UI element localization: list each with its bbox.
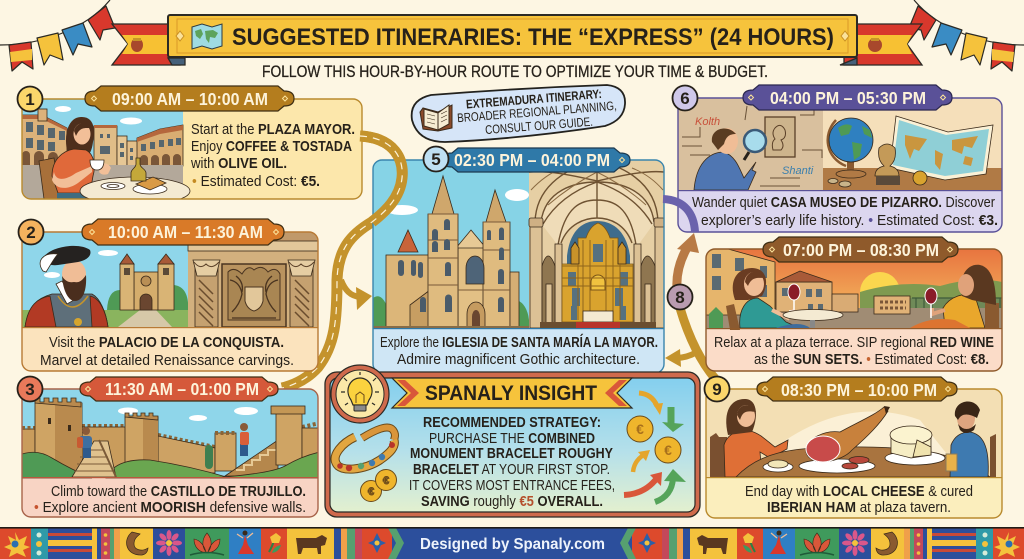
text: recommended strategy: RECOMMENDED STRATEGY: bbox=[423, 415, 601, 431]
flag ribbon right bbox=[840, 24, 922, 65]
badge 9 bbox=[704, 376, 730, 402]
illustration: man with magnifier at wall: Shanti bbox=[782, 165, 814, 177]
panel: stop 8 terrace sunset bbox=[706, 249, 1002, 371]
text: recommended strategy bbox=[409, 415, 615, 510]
badge 6: 6 bbox=[680, 89, 690, 108]
illustration: conquistador, palace and carvings bbox=[22, 232, 318, 327]
badge 8 bbox=[668, 284, 692, 310]
time pill 3: 11:30 AM – 01:00 PM bbox=[105, 379, 259, 399]
badge 5 bbox=[424, 146, 448, 172]
route arrow: 9 to 8 and card 5 bbox=[665, 308, 718, 382]
text: stop 1: Start at the PLAZA MAYOR. bbox=[191, 121, 355, 138]
panel: stop 9 tavern bbox=[706, 389, 1002, 518]
illustration: man with magnifier at wall: Kolth bbox=[695, 116, 720, 128]
time pill 8: 07:00 PM – 08:30 PM bbox=[783, 240, 939, 260]
text: guide note: BROADER REGIONAL PLANNING, bbox=[457, 99, 617, 125]
badge 2: 2 bbox=[26, 223, 36, 242]
bunting: top right bbox=[909, 0, 1024, 71]
text: guide note: EXTREMADURA ITINERARY: bbox=[466, 87, 602, 112]
panel: stop 3 castillo bbox=[22, 389, 320, 517]
time pill 6 bbox=[743, 85, 952, 110]
badge 8: 8 bbox=[675, 288, 685, 307]
panel: spanaly insight bbox=[325, 365, 700, 517]
text: stop 6: Wander quiet CASA MUSEO DE PIZARRO. Discover bbox=[692, 194, 995, 211]
badge 1: 1 bbox=[25, 90, 35, 109]
route arrow: 8 up to 6 bbox=[677, 233, 699, 288]
illustration: castle walls and climbers bbox=[22, 389, 320, 478]
arrowhead: into cathedral bbox=[356, 287, 372, 310]
flag ribbon left bbox=[112, 24, 185, 65]
text: recommended strategy: IT COVERS MOST ENTRANCE FEES, bbox=[409, 478, 615, 494]
ribbon: insight title: SPANALY INSIGHT bbox=[425, 381, 597, 405]
text: recommended strategy: SAVING roughly €5 OVERALL. bbox=[421, 494, 603, 510]
badge 3: 3 bbox=[25, 380, 35, 399]
text: stop 3 bbox=[34, 483, 306, 516]
arrow: into cathedral bbox=[341, 280, 360, 297]
icon: euro coins left: € bbox=[368, 486, 374, 498]
icon: euro coins left bbox=[360, 470, 396, 502]
footer band bbox=[0, 527, 1024, 559]
panel: stop 5 iglesia bbox=[373, 160, 665, 373]
route road: arc over cathedral corner bbox=[360, 136, 402, 222]
time pill 5: 02:30 PM – 04:00 PM bbox=[454, 150, 610, 170]
footer pattern: right half bbox=[620, 528, 1024, 559]
panel: stop 1 plaza mayor bbox=[22, 99, 362, 205]
time pill 2: 10:00 AM – 11:30 AM bbox=[108, 222, 263, 242]
illustration: gothic cathedral exterior bbox=[373, 160, 529, 328]
icon: euro coins left: € bbox=[383, 475, 389, 487]
footer pattern: left half bbox=[0, 528, 404, 559]
time pill 1: 09:00 AM – 10:00 AM bbox=[112, 89, 268, 109]
text: stop 5: Explore the IGLESIA DE SANTA MARÍA LA MAYOR. bbox=[380, 334, 658, 351]
route road: stop 3 up to cathedral bbox=[282, 136, 402, 388]
text: stop 8 bbox=[714, 334, 994, 368]
time pill 6: 04:00 PM – 05:30 PM bbox=[770, 88, 926, 108]
badge 3 bbox=[18, 376, 42, 402]
icon: coins and savings arrows bbox=[624, 393, 686, 502]
bunting: top left bbox=[0, 0, 115, 71]
text: stop 1: Enjoy COFFEE & TOSTADA bbox=[191, 138, 352, 155]
title banner bbox=[168, 15, 857, 57]
text: stop 1 bbox=[190, 121, 355, 190]
text: guide note bbox=[456, 86, 618, 139]
text: stop 6 bbox=[692, 194, 998, 229]
icon: coins and savings arrows: € bbox=[636, 421, 644, 437]
text: stop 9 bbox=[745, 483, 973, 516]
text: stop 2: Marvel at detailed Renaissance carvings. bbox=[40, 352, 294, 369]
illustration: cathedral interior with golden altarpiece bbox=[529, 160, 665, 328]
text: recommended strategy: BRACELET AT YOUR FIRST STOP. bbox=[413, 462, 610, 478]
text: stop 8: as the SUN SETS. • Estimated Cost: €8. bbox=[754, 351, 989, 368]
text: stop 8: Relax at a plaza terrace. SIP regional RED WINE bbox=[714, 334, 994, 351]
panel: stop 2 palacio bbox=[22, 232, 318, 371]
text: recommended strategy: MONUMENT BRACELET ROUGHY bbox=[410, 446, 613, 462]
illustration: man with magnifier at wall bbox=[678, 98, 1002, 190]
text: stop 2 bbox=[40, 334, 294, 369]
text: stop 5 bbox=[380, 334, 658, 368]
callout: extremadura guide bubble bbox=[412, 85, 625, 142]
text: stop 3: Climb toward the CASTILLO DE TRUJILLO. bbox=[51, 483, 306, 500]
badge 5: 5 bbox=[431, 150, 441, 169]
illustration: woman with coffee in plaza bbox=[22, 99, 190, 205]
time pill 1 bbox=[85, 86, 294, 111]
text: stop 9: IBERIAN HAM at plaza tavern. bbox=[767, 499, 951, 516]
time pill 2 bbox=[82, 219, 284, 245]
icon: world map bbox=[192, 24, 222, 49]
ribbon: insight title bbox=[392, 378, 632, 408]
text: stop 1: • Estimated Cost: €5. bbox=[192, 173, 320, 190]
badge 9: 9 bbox=[712, 380, 722, 399]
icon: light bulb bbox=[331, 365, 389, 423]
icon: open book bbox=[420, 105, 452, 131]
time pill 9: 08:30 PM – 10:00 PM bbox=[781, 380, 937, 400]
text: stop 3: • Explore ancient MOORISH defensive walls. bbox=[34, 499, 306, 516]
badge 6 bbox=[672, 86, 698, 110]
text: stop 6: explorer’s early life history. • Estimated Cost: €3. bbox=[701, 212, 998, 229]
text: stop 1: with OLIVE OIL. bbox=[190, 155, 287, 172]
title text: SUGGESTED ITINERARIES: THE “EXPRESS” (24 HOURS) bbox=[232, 24, 834, 51]
illustration: ham, cheese and diners at table bbox=[706, 389, 1002, 477]
badge 1 bbox=[18, 86, 42, 112]
illustration: friends with red wine at sunset bbox=[706, 249, 1002, 330]
text: stop 2: Visit the PALACIO DE LA CONQUISTA. bbox=[49, 334, 284, 351]
icon: coins and savings arrows: € bbox=[664, 442, 672, 458]
text: stop 5: Admire magnificent Gothic architecture. bbox=[397, 351, 640, 368]
route connector: 5 to 6 bbox=[663, 199, 695, 232]
icon: jewelled bracelet bbox=[335, 428, 395, 471]
badge 2 bbox=[18, 220, 44, 244]
subtitle: FOLLOW THIS HOUR-BY-HOUR ROUTE TO OPTIMIZE YOUR TIME & BUDGET. bbox=[262, 63, 768, 81]
text: stop 9: End day with LOCAL CHEESE & cured bbox=[745, 483, 973, 500]
text: recommended strategy: PURCHASE THE COMBINED bbox=[429, 431, 595, 447]
panel: stop 6 casa museo bbox=[678, 98, 1002, 232]
text: guide note: CONSULT OUR GUIDE. bbox=[485, 115, 593, 137]
footer credit: Designed by Spanaly.com bbox=[420, 536, 605, 553]
